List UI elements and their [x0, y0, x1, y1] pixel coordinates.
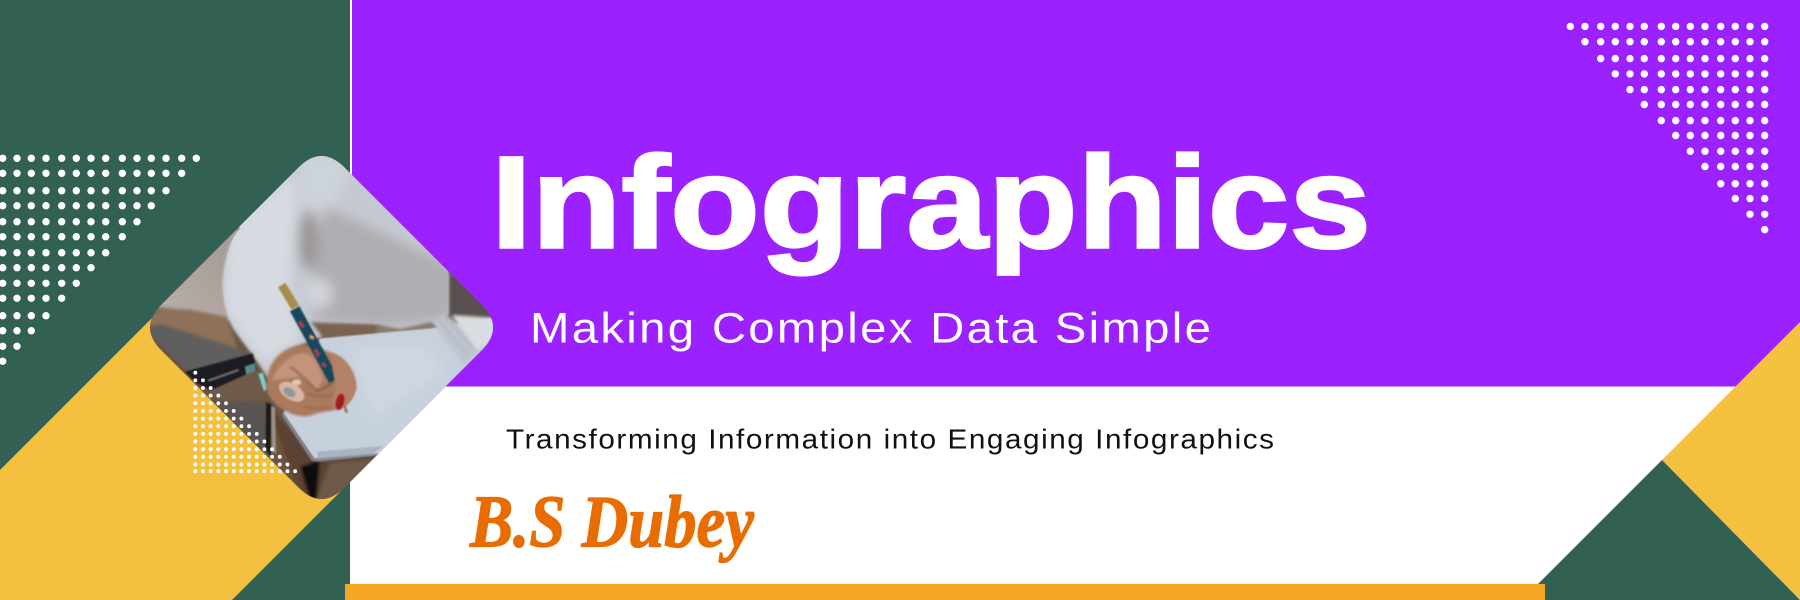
wall behind the arm [157, 228, 239, 322]
shape: green right triangle [1522, 460, 1800, 600]
notebook back page [450, 313, 493, 350]
dot pattern: right triangle [1570, 26, 1765, 230]
author name: B.S Dubey [469, 482, 755, 564]
tagline: Transforming Information into Engaging Infographics [506, 424, 1274, 455]
dot pattern: small triangle over photo [195, 373, 296, 471]
red nail [334, 393, 346, 411]
title: Infographics [491, 128, 1371, 276]
panel: purple header block [352, 0, 1800, 386]
cuff [258, 373, 267, 392]
hand [266, 345, 356, 416]
pen [282, 285, 295, 307]
book top [147, 324, 253, 373]
notebook edge [282, 413, 378, 462]
lower table [267, 403, 380, 503]
photo: hand writing in a notebook, diamond crop [150, 156, 493, 499]
spiral band [430, 314, 478, 366]
dark background right [448, 272, 491, 318]
table behind [150, 307, 238, 349]
ring [278, 381, 305, 402]
sweater silhouette [223, 143, 448, 378]
book spine [185, 353, 257, 391]
dot pattern: left triangle [3, 158, 196, 361]
bar: orange bottom strip [345, 584, 1545, 600]
shape: yellow left block [0, 305, 340, 600]
lighter page area [350, 343, 447, 417]
notebook body [283, 317, 502, 460]
subtitle: Making Complex Data Simple [530, 304, 1211, 352]
index finger over pen [332, 353, 356, 410]
tablet [208, 401, 271, 457]
panel: green left block [0, 0, 350, 600]
shape: yellow right triangle [1662, 322, 1800, 600]
strip between sweater and notebook [310, 320, 378, 338]
sweater shading [223, 147, 453, 363]
wood below book [211, 370, 270, 401]
